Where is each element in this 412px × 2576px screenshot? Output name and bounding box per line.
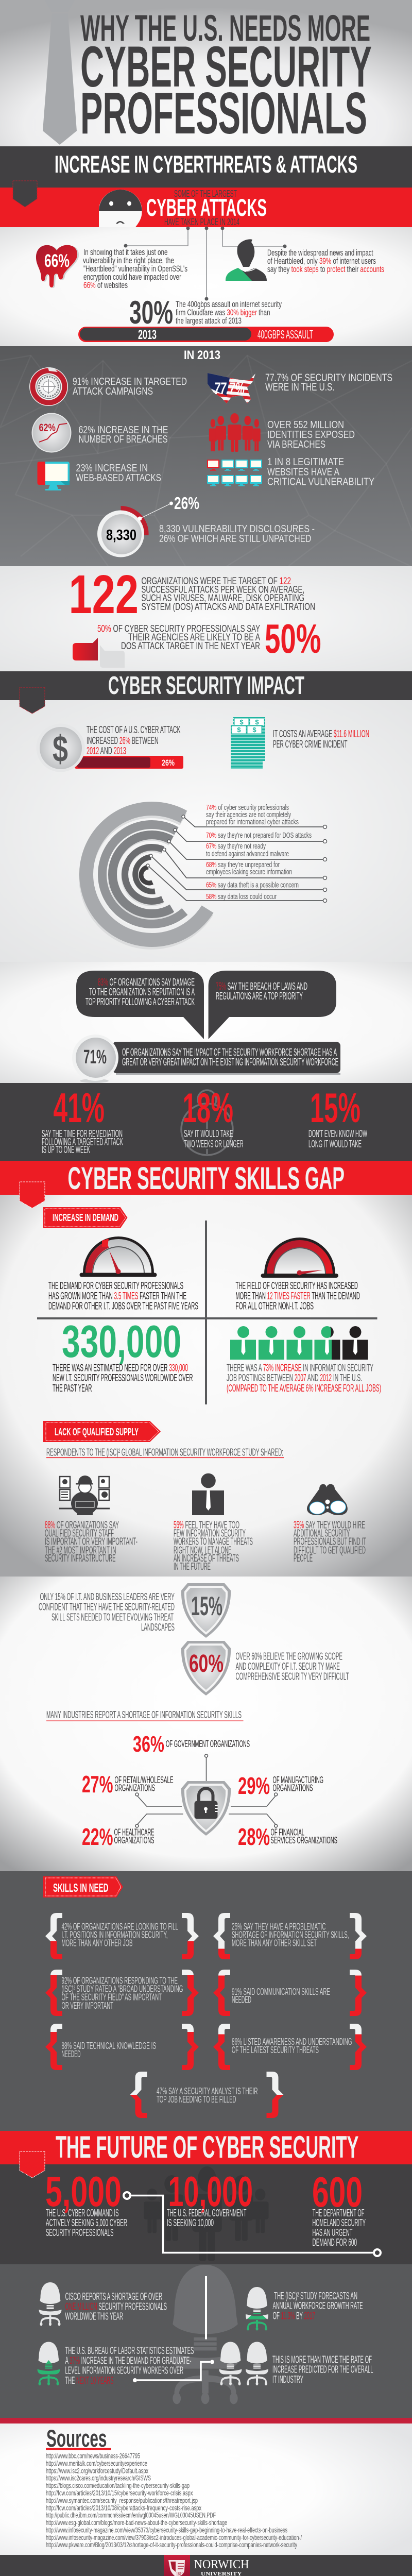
panel: shields and industries xyxy=(0,1577,412,1871)
text: cisco: WORLDWIDE THIS YEAR xyxy=(65,2311,123,2323)
label: lack of qualified supply: LACK OF QUALIFIED SUPPLY xyxy=(55,1427,139,1438)
icon: two chairs xyxy=(219,2342,268,2385)
label: lack of qualified supply xyxy=(43,1421,161,1442)
callout: 71% workforce shortage xyxy=(72,1035,340,1083)
panel: remediation time: SAY THE TIME FOR REMEDIATION xyxy=(42,1128,123,1140)
stat: 330,000: 330,000 xyxy=(62,1316,181,1367)
callout: laws: 75% SAY THE BREACH OF LAWS AND xyxy=(216,981,307,992)
icon: shield 60%: 60% xyxy=(189,1650,224,1677)
text: targeted: 91% INCREASE IN TARGETED xyxy=(73,376,187,387)
chart: gauge 3.5 times xyxy=(79,1236,157,1277)
callout: reputation: TO THE ORGANIZATION'S REPUTATION IS A xyxy=(89,987,195,998)
stat: government: 36% xyxy=(133,1732,164,1757)
panel: footer xyxy=(0,2555,412,2576)
text: breaches: NUMBER OF BREACHES xyxy=(78,433,168,445)
stat: government xyxy=(133,1732,250,1757)
stat: 50%: 50% xyxy=(265,616,321,662)
panel: top priorities xyxy=(0,962,412,1083)
text: targeted xyxy=(73,376,187,397)
text: cost: 2012 AND 2013 xyxy=(87,745,126,757)
panel: remediation time xyxy=(0,1083,412,1161)
text: internet users: of Heartbleed, only 39% of internet users xyxy=(267,256,376,266)
panel: government demand xyxy=(0,2151,412,2264)
brace card: 92%: OR VERY IMPORTANT xyxy=(62,2001,113,2011)
stat: financial: 28% xyxy=(238,1823,270,1850)
text: 88%: SECURITY INFRASTRUCTURE xyxy=(45,1553,115,1564)
icon: bleeding heart: 66% xyxy=(44,251,70,271)
text: homeland security: HAS AN URGENT xyxy=(312,2227,352,2239)
callout: laws xyxy=(209,971,336,1039)
text: isc forecast xyxy=(273,2291,363,2321)
text: web attacks: 23% INCREASE IN xyxy=(76,462,148,474)
text: isc forecast: OF 11.3% BY 2017 xyxy=(273,2310,315,2321)
connector xyxy=(124,2192,381,2256)
text: disclosures: 8,330 VULNERABILITY DISCLOSURES - xyxy=(159,523,315,535)
text: cost xyxy=(87,724,181,757)
text: 15% confident xyxy=(39,1591,175,1633)
icon: shield 60% xyxy=(181,1641,231,1696)
brace card: 47% xyxy=(130,2072,283,2118)
text: cloudfare xyxy=(176,299,282,326)
stat: healthcare xyxy=(82,1823,154,1850)
brace card: 91%: NEEDED xyxy=(232,1995,251,2005)
stat: healthcare: OF HEALTHCARE xyxy=(114,1827,154,1837)
icon: 62% growth circle xyxy=(32,413,71,452)
brace card: 42% xyxy=(45,1913,199,1959)
label: skills in need xyxy=(43,1876,123,1897)
stat: financial xyxy=(238,1823,337,1850)
text: cloudfare: The 400gbps assault on internet security xyxy=(176,299,282,309)
icon: shield 15% xyxy=(181,1583,231,1638)
text: disclosures: 26% OF WHICH ARE STILL UNPATCHED xyxy=(159,533,311,545)
brace card: 92%: 92% OF ORGANIZATIONS RESPONDING TO THE xyxy=(62,1975,178,1986)
text: 15% confident: ONLY 15% OF I.T. AND BUSINESS LEADERS ARE VERY xyxy=(40,1591,175,1603)
panel: shields and industries: LANDSCAPES xyxy=(141,1622,175,1633)
connector lines xyxy=(126,228,285,299)
text: cost: THE COST OF A U.S. CYBER ATTACK xyxy=(87,724,181,736)
list: source urls: http://fcw.com/articles/2013/10/15/cybersecurity-workforce-crisis.aspx xyxy=(46,2488,193,2497)
text: 18% detail: SAY IT WOULD TAKE xyxy=(184,1128,233,1140)
text: heartbleed: In showing that it takes just one xyxy=(83,247,168,257)
icon: man with tie xyxy=(192,1473,224,1515)
label: skills in need: SKILLS IN NEED xyxy=(53,1881,108,1894)
heading: IN 2013 xyxy=(184,348,220,362)
text: 330,000 detail: THE PAST YEAR xyxy=(53,1383,92,1394)
stat: 18%: 18% xyxy=(182,1085,233,1131)
icon: binoculars xyxy=(307,1484,348,1515)
icon: chair labor statistics xyxy=(37,2342,60,2385)
text: survey results xyxy=(206,803,312,901)
text: cyber command: THE U.S. CYBER COMMAND IS xyxy=(46,2208,118,2219)
text: 50% description: DOS ATTACK TARGET IN THE NEXT YEAR xyxy=(121,641,260,652)
panel: impact xyxy=(0,687,412,962)
panel: government demand: ACTIVELY SEEKING 5,000 CYBER xyxy=(46,2217,127,2229)
chart: 8,330 donut: 8,330 xyxy=(106,527,136,544)
text: 88%: QUALIFIED SECURITY STAFF xyxy=(45,1528,114,1539)
text: survey results: 68% say they're unprepared for xyxy=(206,860,280,869)
icon: group of people xyxy=(209,413,261,452)
text: breaches: 62% INCREASE IN THE xyxy=(78,424,168,436)
panel: government demand: THE U.S. FEDERAL GOVERNMENT xyxy=(167,2208,246,2219)
list: source urls: http://www.bbc.com/news/business-26647795 xyxy=(46,2451,140,2460)
brace card: 86%: OF THE LATEST SECURITY THREATS xyxy=(232,2045,319,2055)
text: 12 times faster: MORE THAN 12 TIMES FASTER THAN THE DEMAND xyxy=(236,1291,360,1302)
icon: money stacks xyxy=(231,717,265,769)
brace card: 25% xyxy=(213,1913,367,1959)
icon: large faded chair xyxy=(169,2265,241,2404)
stat: 15%: 15% xyxy=(310,1085,360,1131)
text: 50% description: THEIR AGENCIES ARE LIKELY TO BE A xyxy=(128,632,260,643)
panel: increase in demand: IS IMPORTANT OR VERY IMPORTANT- xyxy=(45,1536,138,1548)
callout: reputation: TOP PRIORITY FOLLOWING A CYBER ATTACK xyxy=(85,996,195,1008)
brace card: 42%: MORE THAN ANY OTHER JOB xyxy=(62,1938,133,1948)
stat: government: OF GOVERNMENT ORGANIZATIONS xyxy=(166,1738,250,1749)
icon: monitor xyxy=(37,462,70,490)
brace card: 91%: 91% SAID COMMUNICATION SKILLS ARE xyxy=(232,1987,330,1997)
text: average cost xyxy=(273,728,369,750)
stat: healthcare: 22% xyxy=(82,1823,113,1850)
brace card: 47%: 47% SAY A SECURITY ANALYST IS THEIR xyxy=(157,2086,258,2096)
text: identities: IDENTITIES EXPOSED xyxy=(267,429,355,440)
text: cyber command xyxy=(46,2208,127,2239)
text: survey results: 58% say data loss could occur xyxy=(206,892,277,901)
text: 56%: IN THE FUTURE xyxy=(174,1561,211,1572)
text: survey results: say their agencies are not completely xyxy=(206,810,291,819)
panel: increase in demand xyxy=(0,1182,412,1577)
icon: us flag map: 77.7% xyxy=(214,379,245,398)
panel: 122 and 50% xyxy=(0,564,412,671)
text: heartbleed: 66% of websites xyxy=(83,280,128,290)
text: legitimate websites xyxy=(267,456,374,487)
panel: shields and industries: CONFIDENT THAT THEY HAVE THE SECURITY-RELATED xyxy=(39,1601,175,1613)
icon: shield 15%: 15% xyxy=(191,1591,222,1621)
text: 56%: 56% FEEL THEY HAVE TOO xyxy=(174,1520,239,1531)
text: homeland security: DEMAND FOR 600 xyxy=(312,2237,357,2248)
text: identities xyxy=(267,419,355,450)
icon: ribbon xyxy=(20,2151,45,2178)
text: 12 times faster xyxy=(236,1280,360,1312)
text: heartbleed: encryption could have impacted over xyxy=(83,272,181,282)
text: 122 description xyxy=(141,576,315,613)
stat: 10,000: 10,000 xyxy=(168,2167,253,2215)
heading: cyber attacks xyxy=(146,189,267,227)
title xyxy=(80,8,372,146)
text: 88%: 88% OF ORGANIZATIONS SAY xyxy=(45,1520,119,1531)
stat: 600: 600 xyxy=(312,2168,363,2216)
icon: chair cisco xyxy=(39,2282,62,2326)
stat: financial: OF FINANCIAL xyxy=(271,1827,304,1837)
text: job postings xyxy=(227,1362,381,1394)
stat: manufacturing: OF MANUFACTURING xyxy=(273,1775,323,1785)
list: source urls: http://www.esg-global.com/blogs/more-bad-news-about-the-cybersecurity-skills-shortage xyxy=(46,2518,227,2527)
stat: 5,000: 5,000 xyxy=(45,2167,122,2215)
icon: necktie xyxy=(43,0,77,145)
icon: bleeding heart xyxy=(36,245,79,288)
brace card: 91% xyxy=(213,1970,367,2016)
stat: healthcare: ORGANIZATIONS xyxy=(114,1835,154,1845)
text: 3.5 times faster: HAS GROWN MORE THAN 3.5 TIMES FASTER THAN THE xyxy=(48,1291,186,1302)
icon: ribbon xyxy=(20,1182,45,1208)
text: survey results: 74% of cyber security professionals xyxy=(206,803,289,812)
text: 122 description: SYSTEM (DOS) ATTACKS AND DATA EXFILTRATION xyxy=(141,602,315,613)
text: federal government: IS SEEKING 10,000 xyxy=(167,2217,214,2229)
heading: cyber attacks: SOME OF THE LARGEST xyxy=(174,189,237,199)
text: cyber command: SECURITY PROFESSIONALS xyxy=(46,2227,113,2239)
icon: lock shield xyxy=(181,1781,231,1836)
icon: target xyxy=(29,367,68,406)
brace card: 92%: (ISC)² STUDY RATED A "BROAD UNDERSTANDING xyxy=(62,1984,183,1994)
text: 122 description: SUCCESSFUL ATTACKS PER WEEK ON AVERAGE, xyxy=(141,584,304,596)
text: identities: VIA BREACHES xyxy=(267,438,325,450)
icon: person silhouette xyxy=(226,239,267,281)
text: 122 description: ORGANIZATIONS WERE THE TARGET OF 122 xyxy=(141,576,291,587)
text: labor statistics xyxy=(65,2345,194,2386)
list: source urls: http://fcw.com/articles/2013/10/08/cyberattacks-frequency-costs-rise.aspx xyxy=(46,2504,201,2512)
chart: 2013 vs assault bar: 400GBPS ASSAULT xyxy=(258,328,313,341)
text: internet users: say they took steps to protect their accounts xyxy=(267,264,384,274)
chart: 2013 vs assault bar xyxy=(78,327,334,342)
text: internet users xyxy=(267,248,384,274)
panel: section heading increase in cyberthreats xyxy=(0,146,412,188)
stat: 122: 122 xyxy=(69,564,139,625)
panel: in 2013 xyxy=(0,346,412,567)
text: 88% xyxy=(45,1520,138,1564)
panel: largest attacks xyxy=(0,227,412,346)
panel: remediation time: FOLLOWING A TARGETED ATTACK xyxy=(42,1137,123,1148)
stat: manufacturing: ORGANIZATIONS xyxy=(273,1783,313,1793)
panel: remediation time: TWO WEEKS OR LONGER xyxy=(184,1139,243,1150)
panel: header xyxy=(0,0,412,146)
text: average cost: IT COSTS AN AVERAGE $11.6 MILLION xyxy=(273,728,369,740)
stat: manufacturing: 29% xyxy=(238,1772,270,1799)
icon: faded crowd xyxy=(144,2166,268,2261)
chart: 26% cost bar: 26% xyxy=(162,758,175,768)
icon: stopwatch xyxy=(181,1090,233,1155)
list: source urls: https://blogs.cisco.com/education/tackling-the-cybersecurity-skills-gap xyxy=(46,2481,190,2489)
text: job postings: JOB POSTINGS BETWEEN 2007 AND 2012 IN THE U.S. xyxy=(227,1372,362,1384)
text: 12 times faster: FOR ALL OTHER NON-I.T. JOBS xyxy=(236,1300,314,1312)
text: 50% description: 50% OF CYBER SECURITY PROFESSIONALS SAY xyxy=(97,623,260,635)
list: source urls: http://www.symantec.com/security_response/publications/threatreport.jsp xyxy=(46,2496,198,2504)
text: labor statistics: THE NEXT 10 YEARS xyxy=(65,2375,113,2386)
icon: norwich crest xyxy=(164,2555,190,2576)
chart: concentric arcs xyxy=(85,809,208,943)
label: increase in demand xyxy=(43,1207,128,1228)
text: 41% detail: IS UP TO ONE WEEK xyxy=(42,1144,90,1156)
text: 56%: RIGHT NOW, LET ALONE xyxy=(174,1545,232,1556)
text: heartbleed xyxy=(83,247,187,290)
text: 3.5 times faster xyxy=(48,1280,198,1312)
callout: 71% workforce shortage: 71% xyxy=(83,1046,107,1068)
text: heartbleed: "Heartbleed" vulnerability in OpenSSL's xyxy=(83,264,187,274)
text: homeland security xyxy=(312,2208,366,2248)
heading: sources xyxy=(46,2425,111,2452)
chart: 8,330 donut xyxy=(97,494,199,557)
panel: sources xyxy=(0,2418,412,2555)
icon: eight monitors xyxy=(207,460,262,486)
text: cisco: CISCO REPORTS A SHORTAGE OF OVER xyxy=(65,2291,162,2302)
callout: reputation xyxy=(76,971,204,1039)
stat: retail xyxy=(82,1771,173,1798)
brace card: 47%: TOP JOB NEEDING TO BE FILLED xyxy=(157,2094,236,2105)
text: federal government xyxy=(167,2208,246,2229)
heading: sources: Sources xyxy=(46,2425,107,2452)
stat: manufacturing xyxy=(238,1772,323,1799)
brace card: 88%: 88% SAID TECHNICAL KNOWLEDGE IS xyxy=(62,2041,156,2051)
connector lines xyxy=(148,817,325,901)
chart: 26% cost bar xyxy=(75,756,183,769)
text: heartbleed: vulnerability in the right place, the xyxy=(83,256,174,265)
chart: 2013 vs assault bar: 2013 xyxy=(138,328,157,342)
text: web attacks xyxy=(76,462,161,484)
text: survey results: employees leaking secure information xyxy=(206,868,292,876)
brace card: 42%: 42% OF ORGANIZATIONS ARE LOOKING TO FILL xyxy=(62,1922,178,1932)
stat: retail: 27% xyxy=(82,1771,113,1798)
icon: hacker head xyxy=(99,190,142,227)
panel: increase in demand: WORKERS TO MANAGE THREATS xyxy=(174,1536,253,1548)
panel: section heading skills gap xyxy=(0,1161,412,1196)
panel: red band cyber attacks xyxy=(0,181,412,227)
text: labor statistics: A 37% INCREASE IN THE DEMAND FOR GRADUATE- xyxy=(65,2355,192,2367)
panel: increase in demand: DEMAND FOR OTHER I.T. JOBS OVER THE PAST FIVE YEARS xyxy=(48,1300,198,1312)
brace card: 92%: OF THE SECURITY FIELD" AS IMPORTANT xyxy=(62,1992,162,2002)
stat: financial: SERVICES ORGANIZATIONS xyxy=(271,1835,337,1845)
text: 35%: ADDITIONAL SECURITY xyxy=(294,1528,350,1539)
panel: section heading future xyxy=(0,2130,412,2164)
text: 88%: THE #2 MOST IMPORTANT IN xyxy=(45,1545,116,1556)
icon: worker at laptop xyxy=(59,1476,110,1515)
list: source urls: http://www.meritalk.com/cybersecurityexperience xyxy=(46,2459,147,2467)
text: web attacks: WEB-BASED ATTACKS xyxy=(76,472,161,484)
icon: speech bubbles xyxy=(73,638,125,668)
panel: forecasts: THE U.S. BUREAU OF LABOR STATISTICS ESTIMATES xyxy=(65,2345,194,2357)
text: cisco: ONE MILLION SECURITY PROFESSIONALS xyxy=(65,2301,167,2312)
callout: reputation: 83% OF ORGANIZATIONS SAY DAMAGE xyxy=(98,977,195,988)
text: 60% scope xyxy=(236,1651,349,1683)
stat: retail: OF RETAIL/WHOLESALE xyxy=(114,1775,173,1785)
icon: dollar coin: $ xyxy=(53,728,68,770)
brace card: 92% xyxy=(45,1970,199,2016)
icon: ribbon xyxy=(20,687,45,714)
brace card: 88% xyxy=(45,2024,199,2070)
icon: dollar coin xyxy=(36,723,84,772)
text: 15% detail xyxy=(308,1128,367,1150)
label: increase in demand: INCREASE IN DEMAND xyxy=(53,1212,118,1224)
chart: 8,330 donut: 26% xyxy=(174,494,199,513)
text: breaches xyxy=(78,424,168,445)
text: 56%: AN INCREASE OF THREATS xyxy=(174,1553,239,1564)
panel: shields and industries: SKILL SETS NEEDED TO MEET EVOLVING THREAT xyxy=(52,1612,174,1623)
text: 56%: FEW INFORMATION SECURITY xyxy=(174,1528,246,1539)
text: survey results: to defend against advanced malware xyxy=(206,850,289,858)
text: 18% detail xyxy=(184,1128,243,1150)
logo text: norwich university online: NORWICH xyxy=(194,2558,249,2571)
text: disclosures xyxy=(159,523,315,545)
brace card: 25%: 25% SAY THEY HAVE A PROBLEMATIC xyxy=(232,1922,325,1932)
text: survey results: 67% say they're not ready xyxy=(206,842,266,851)
text: targeted: ATTACK CAMPAIGNS xyxy=(73,385,153,397)
text: survey results: 65% say data theft is a possible concern xyxy=(206,881,299,889)
text: cisco xyxy=(65,2291,167,2323)
icon: us flag map xyxy=(208,373,255,403)
text: survey results: 70% say they're not prepared for DOS attacks xyxy=(206,831,312,840)
text: labor statistics: LEVEL INFORMATION SECURITY WORKERS OVER xyxy=(65,2365,183,2376)
text: twice the rate: IT INDUSTRY xyxy=(272,2374,303,2385)
icon: 62% growth circle: 62% xyxy=(39,422,56,434)
icon: five professionals xyxy=(230,1326,368,1360)
text: twice the rate xyxy=(272,2354,373,2385)
list: source urls xyxy=(46,2451,302,2549)
text: 35%: PEOPLE xyxy=(294,1553,313,1564)
panel: skills in need xyxy=(0,1871,412,2131)
brace card: 86% xyxy=(213,2024,367,2070)
connectors xyxy=(137,2276,210,2380)
brace card: 42%: I.T. POSITIONS IN INFORMATION SECURITY, xyxy=(62,1930,168,1940)
text: 50% description xyxy=(97,623,260,652)
icon: ribbon xyxy=(13,181,37,207)
stat: retail: ORGANIZATIONS xyxy=(114,1783,155,1793)
text: us incidents xyxy=(265,371,392,393)
callout: laws: REGULATIONS ARE A TOP PRIORITY xyxy=(216,991,303,1002)
text: legitimate websites: CRITICAL VULNERABILITY xyxy=(267,476,374,487)
list: source urls: https://www.isc2cares.org/industryresearch/GISWS xyxy=(46,2474,151,2482)
heading: cyber attacks: HAVE TAKEN PLACE IN 2014 xyxy=(164,217,239,227)
stat: 30%: 30% xyxy=(129,295,173,331)
text: us incidents: WERE IN THE U.S. xyxy=(265,381,335,393)
text: 35% xyxy=(294,1520,366,1564)
text: legitimate websites: WEBSITES HAVE A xyxy=(267,466,339,478)
panel: increase in demand: NEW I.T. SECURITY PROFESSIONALS WORLDWIDE OVER xyxy=(53,1372,193,1384)
text: 330,000 detail: THERE WAS AN ESTIMATED NEED FOR OVER 330,000 xyxy=(53,1362,188,1374)
text: 330,000 detail xyxy=(53,1362,193,1394)
brace card: 88%: NEEDED xyxy=(62,2049,80,2059)
list: source urls: http://www.infosecurity-magazine.com/view/35373/cybersecurity-skills-gap-beginning-to-have-real-effects-on-business xyxy=(46,2526,287,2534)
panel: section heading cyber security impact xyxy=(0,671,412,700)
list: source urls: https://www.isc2.org/workforcestudy/Default.aspx xyxy=(46,2467,148,2475)
text: 122 description: SUCH AS VIRUSES, MALWARE, DISK OPERATING xyxy=(141,593,304,604)
stat: 41%: 41% xyxy=(54,1085,105,1131)
text: 41% detail xyxy=(42,1128,123,1156)
text: identities: OVER 552 MILLION xyxy=(267,419,344,431)
text: cloudfare: firm Cloudfare was 30% bigger than xyxy=(176,308,270,317)
icon: chair growth forecast xyxy=(246,2287,268,2331)
list: source urls: http://public.dhe.ibm.com/common/ssi/ecm/en/wgl03045usen/WGL03045USEN.PDF xyxy=(46,2511,216,2519)
brace card: 25%: MORE THAN ANY OTHER SKILL SET xyxy=(232,1938,317,1948)
text: 56% xyxy=(174,1520,253,1572)
panel: forecasts xyxy=(0,2264,412,2418)
text: cost: INCREASED 26% BETWEEN xyxy=(87,735,159,747)
heading: cyber attacks: CYBER ATTACKS xyxy=(146,194,267,222)
text: legitimate websites: 1 IN 8 LEGITIMATE xyxy=(267,456,344,468)
text: survey results: prepared for international cyber attacks xyxy=(206,818,299,826)
text: 3.5 times faster: THE DEMAND FOR CYBER SECURITY PROFESSIONALS xyxy=(48,1280,183,1292)
chart: gauge 12 times xyxy=(261,1238,338,1278)
connector lines xyxy=(135,1754,278,1827)
text: cloudfare: the largest attack of 2013 xyxy=(176,316,242,326)
